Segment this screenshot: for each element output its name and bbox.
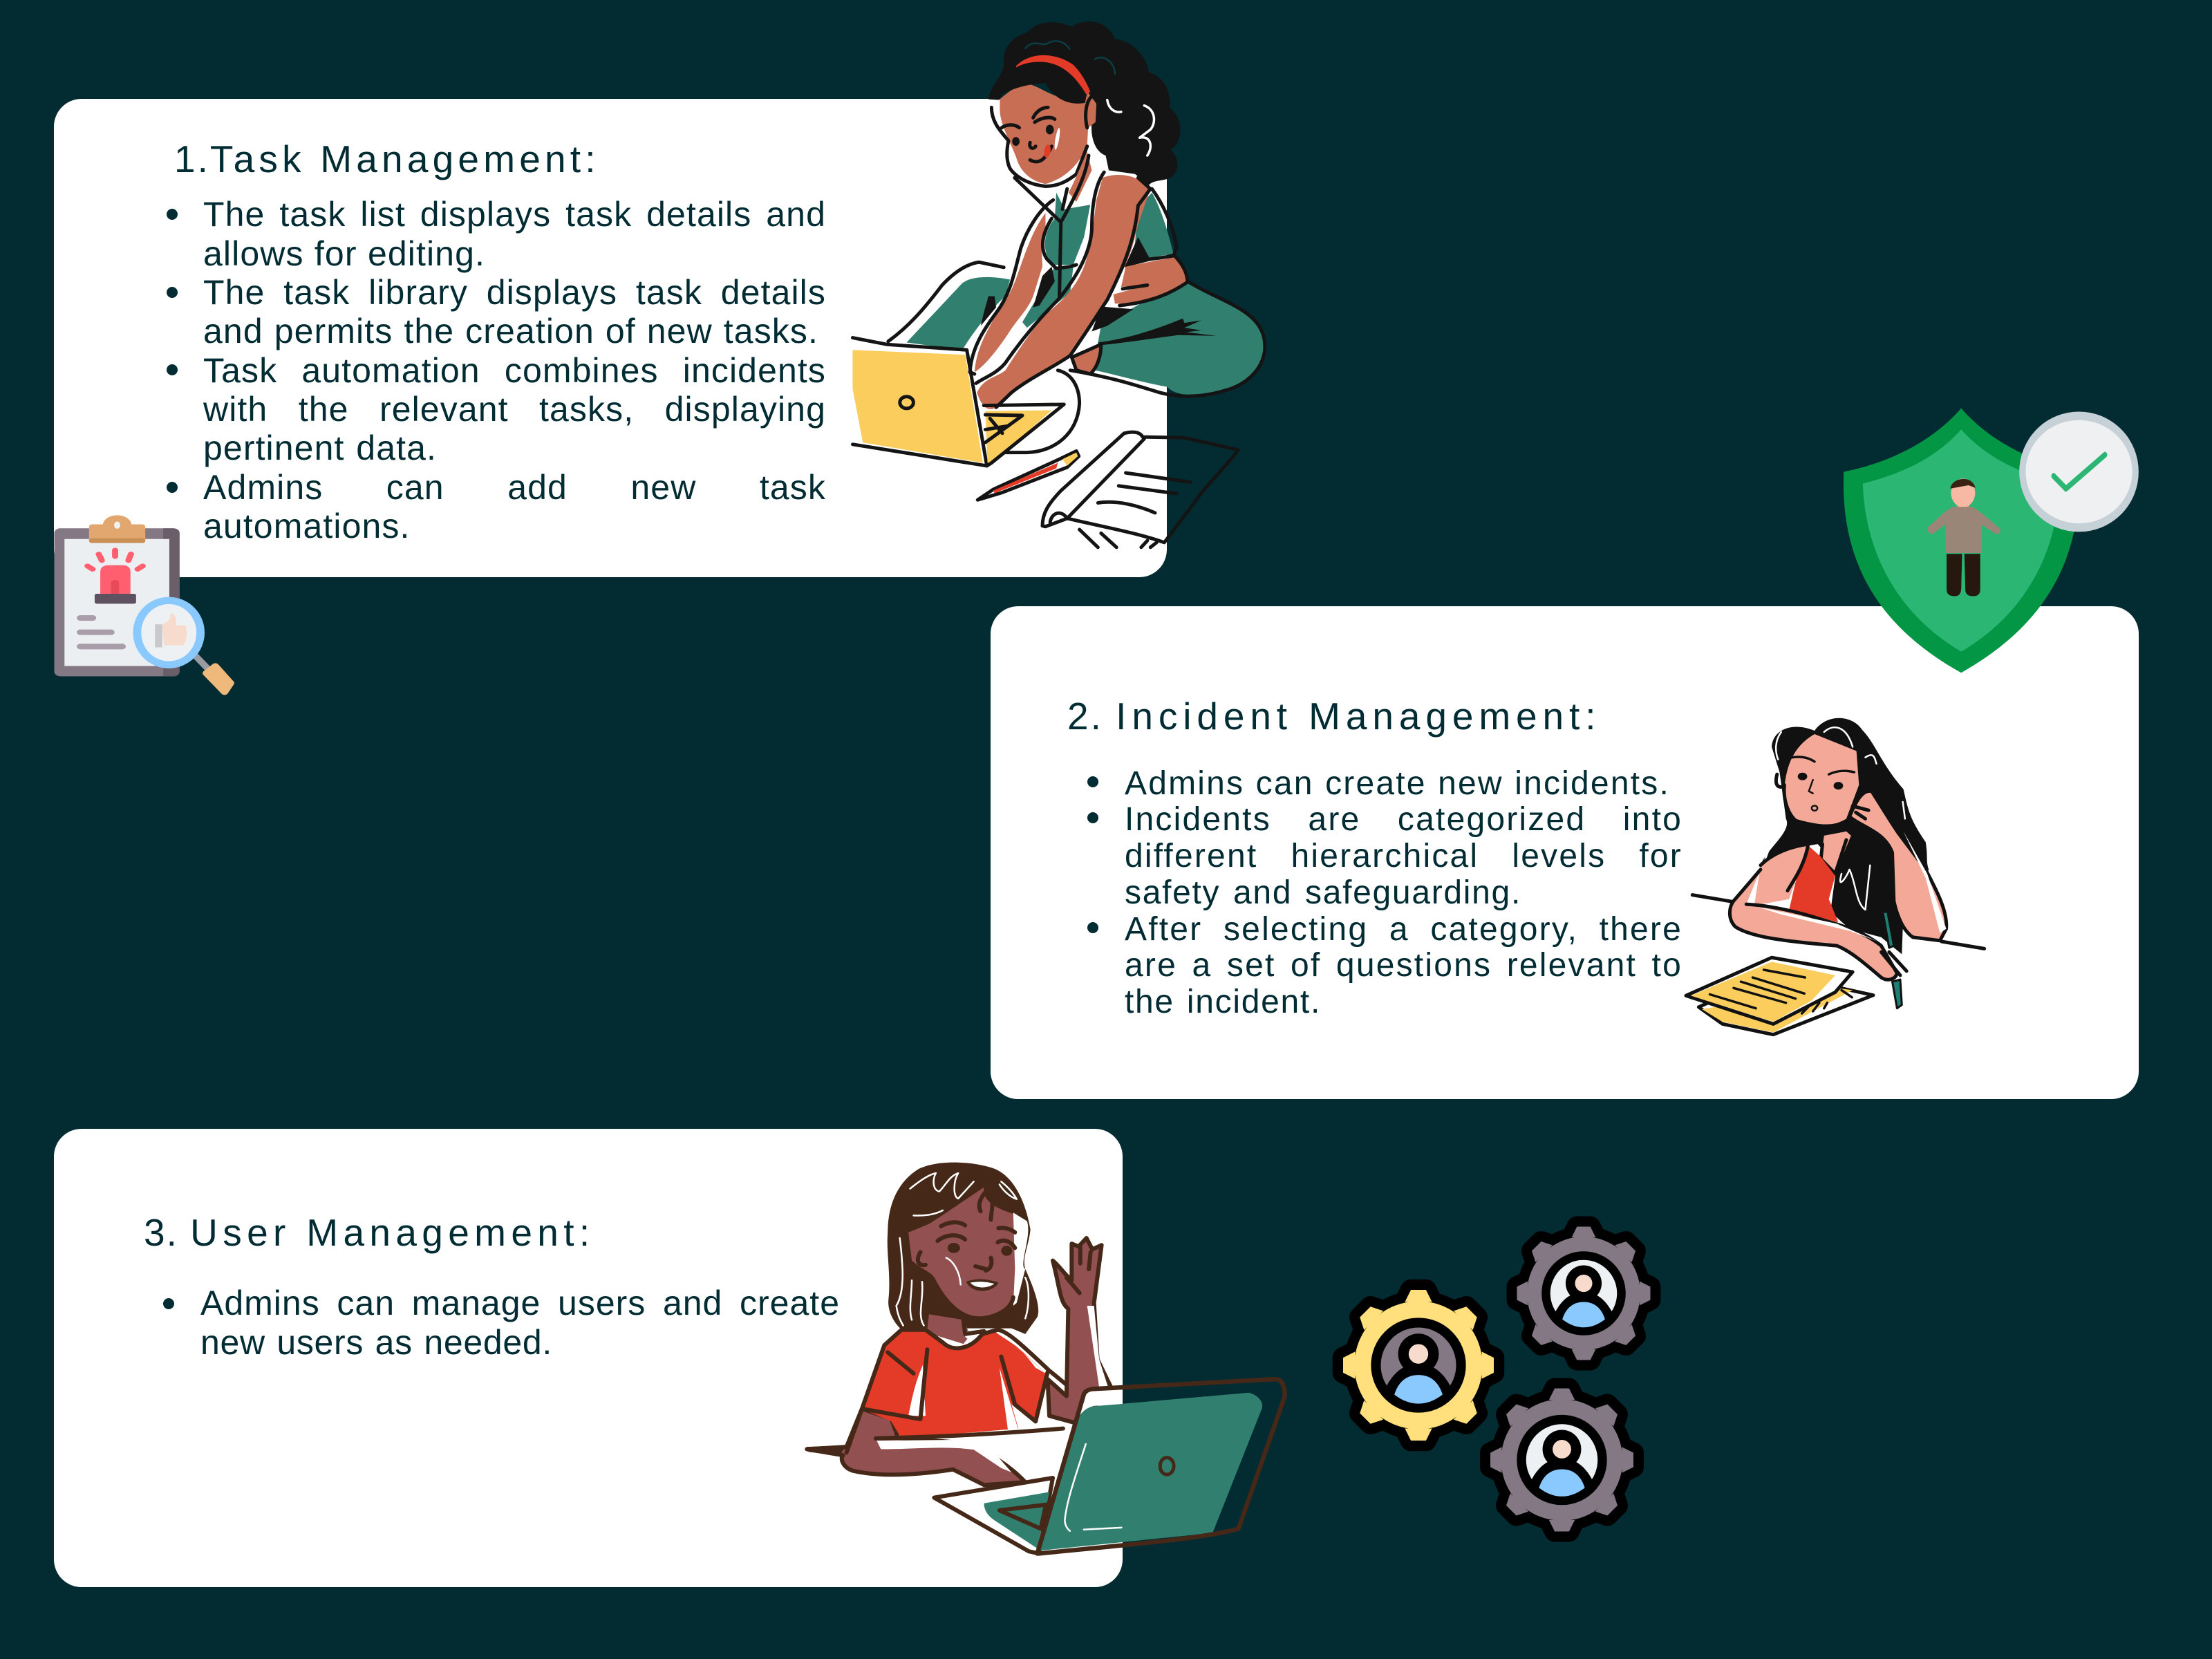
heading: task management: 1.Task Management: bbox=[174, 138, 600, 180]
text block: user management bullets: new users as needed. bbox=[200, 1323, 552, 1362]
panel: incident management bbox=[991, 606, 2139, 1099]
illustration: woman with long hair thinking at desk bbox=[1686, 718, 1985, 1035]
icon: grey user gear top bbox=[1517, 1226, 1651, 1360]
icon: grey user gear bottom bbox=[1490, 1388, 1633, 1532]
illustration: woman waving with green laptop bbox=[807, 1163, 1285, 1553]
text block: task management bullets: Admins can add new task bbox=[203, 467, 826, 506]
text block: incident management bullets: After selecting a category, there bbox=[1125, 911, 1683, 948]
text block: incident management bullets: safety and safeguarding. bbox=[1125, 874, 1521, 911]
text block: incident management bullets: are a set of questions relevant to bbox=[1125, 947, 1683, 984]
text block: task management bullets: pertinent data. bbox=[203, 429, 437, 467]
text block: task management bullets: The task list displays task details and bbox=[203, 195, 826, 234]
text block: incident management bullets: the incident. bbox=[1125, 984, 1321, 1020]
panel: task management bbox=[54, 99, 1167, 577]
text block: task management bullets: and permits the creation of new tasks. bbox=[203, 312, 818, 350]
text block: incident management bullets: Incidents are categorized into bbox=[1125, 801, 1683, 838]
text block: task management bullets: Task automation combines incidents bbox=[203, 351, 826, 390]
text block: task management bullets: allows for editing. bbox=[203, 234, 485, 272]
illustration: woman with yellow laptop bbox=[852, 21, 1265, 547]
text block: task management bullets bbox=[167, 195, 826, 545]
text block: user management bullets: Admins can manage users and create bbox=[200, 1284, 840, 1322]
text block: incident management bullets: different hierarchical levels for bbox=[1125, 838, 1683, 874]
text block: incident management bullets bbox=[1087, 765, 1683, 1020]
text block: task management bullets: The task library displays task details bbox=[203, 273, 826, 312]
text block: task management bullets: with the relevant tasks, displaying bbox=[203, 390, 826, 429]
text block: user management bullets bbox=[163, 1284, 840, 1362]
panel: user management bbox=[54, 1129, 1123, 1587]
text block: incident management bullets: Admins can create new incidents. bbox=[1125, 765, 1670, 802]
heading: user management: 3. User Management: bbox=[144, 1211, 594, 1254]
heading: incident management: 2. Incident Management: bbox=[1067, 695, 1601, 738]
icon: clipboard with siren and magnifier bbox=[54, 515, 231, 692]
icon: shield with person and check badge bbox=[1844, 409, 2135, 673]
icon: yellow user gear bbox=[1343, 1290, 1494, 1441]
text block: task management bullets: automations. bbox=[203, 506, 410, 545]
